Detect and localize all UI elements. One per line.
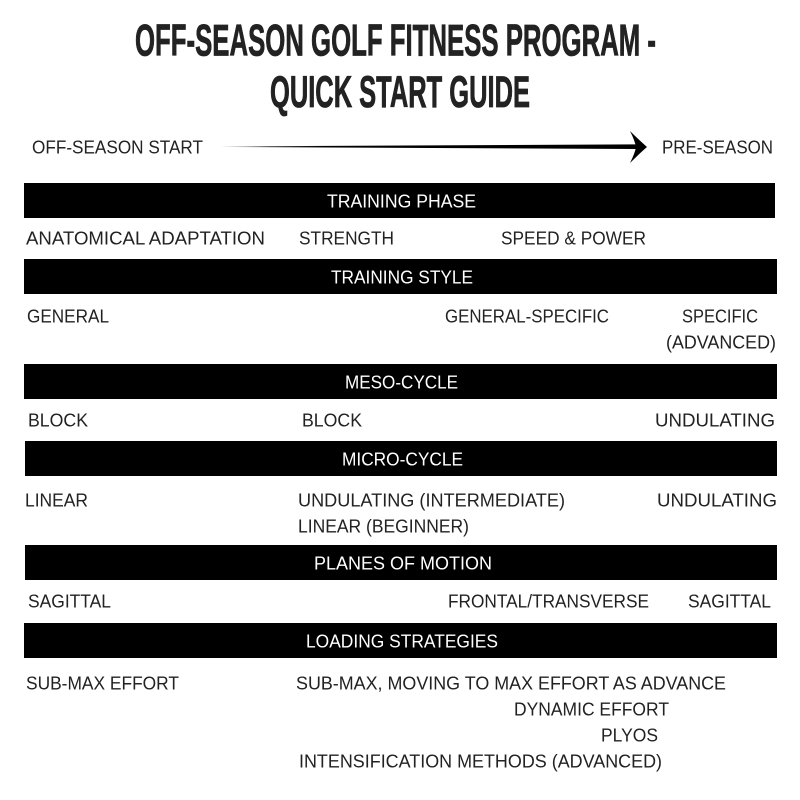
section: training phase: STRENGTH: [299, 228, 394, 248]
section: training phase: [24, 183, 775, 248]
section: micro-cycle: UNDULATING: [657, 490, 777, 510]
arrow: off-season to pre-season: [220, 131, 647, 163]
section: planes of motion: FRONTAL/TRANSVERSE: [448, 590, 649, 612]
section: meso-cycle: BLOCK: [28, 410, 89, 430]
section: training style: TRAINING STYLE: [331, 266, 473, 288]
section: training style: (ADVANCED): [666, 332, 776, 352]
section: micro-cycle: MICRO-CYCLE: [342, 448, 463, 470]
section: training phase: SPEED & POWER: [501, 228, 646, 248]
section: planes of motion: [25, 545, 777, 612]
section: micro-cycle: UNDULATING (INTERMEDIATE): [298, 490, 565, 510]
title: [135, 16, 656, 117]
section: training style: SPECIFIC: [682, 306, 758, 326]
timeline start label: OFF-SEASON START: [32, 136, 203, 158]
title: QUICK START GUIDE: [270, 68, 530, 117]
section: training style: GENERAL-SPECIFIC: [445, 306, 609, 326]
section: meso-cycle: BLOCK: [302, 410, 363, 430]
section: loading strategies: DYNAMIC EFFORT: [514, 698, 669, 720]
section: training style: GENERAL: [27, 306, 109, 326]
section: training phase: TRAINING PHASE: [327, 190, 476, 212]
section: loading strategies: [24, 623, 777, 772]
section: loading strategies: SUB-MAX, MOVING TO MAX EFFORT AS ADVANCE: [296, 672, 726, 694]
section: micro-cycle: LINEAR: [25, 490, 88, 510]
timeline end label: PRE-SEASON: [662, 136, 773, 158]
section: meso-cycle: UNDULATING: [655, 410, 775, 430]
section: planes of motion: PLANES OF MOTION: [314, 552, 492, 574]
section: micro-cycle: [25, 441, 777, 536]
section: loading strategies: INTENSIFICATION METHODS (ADVANCED): [299, 750, 662, 772]
section: planes of motion: SAGITTAL: [28, 590, 111, 612]
section: training style: [24, 259, 777, 352]
section: loading strategies: LOADING STRATEGIES: [306, 630, 498, 652]
section: micro-cycle: LINEAR (BEGINNER): [298, 516, 469, 536]
section: meso-cycle: MESO-CYCLE: [345, 372, 458, 392]
section: loading strategies: SUB-MAX EFFORT: [26, 672, 179, 694]
section: planes of motion: SAGITTAL: [688, 590, 771, 612]
section: meso-cycle: [24, 364, 777, 430]
section: loading strategies: PLYOS: [601, 724, 658, 746]
section: training phase: ANATOMICAL ADAPTATION: [26, 228, 265, 248]
